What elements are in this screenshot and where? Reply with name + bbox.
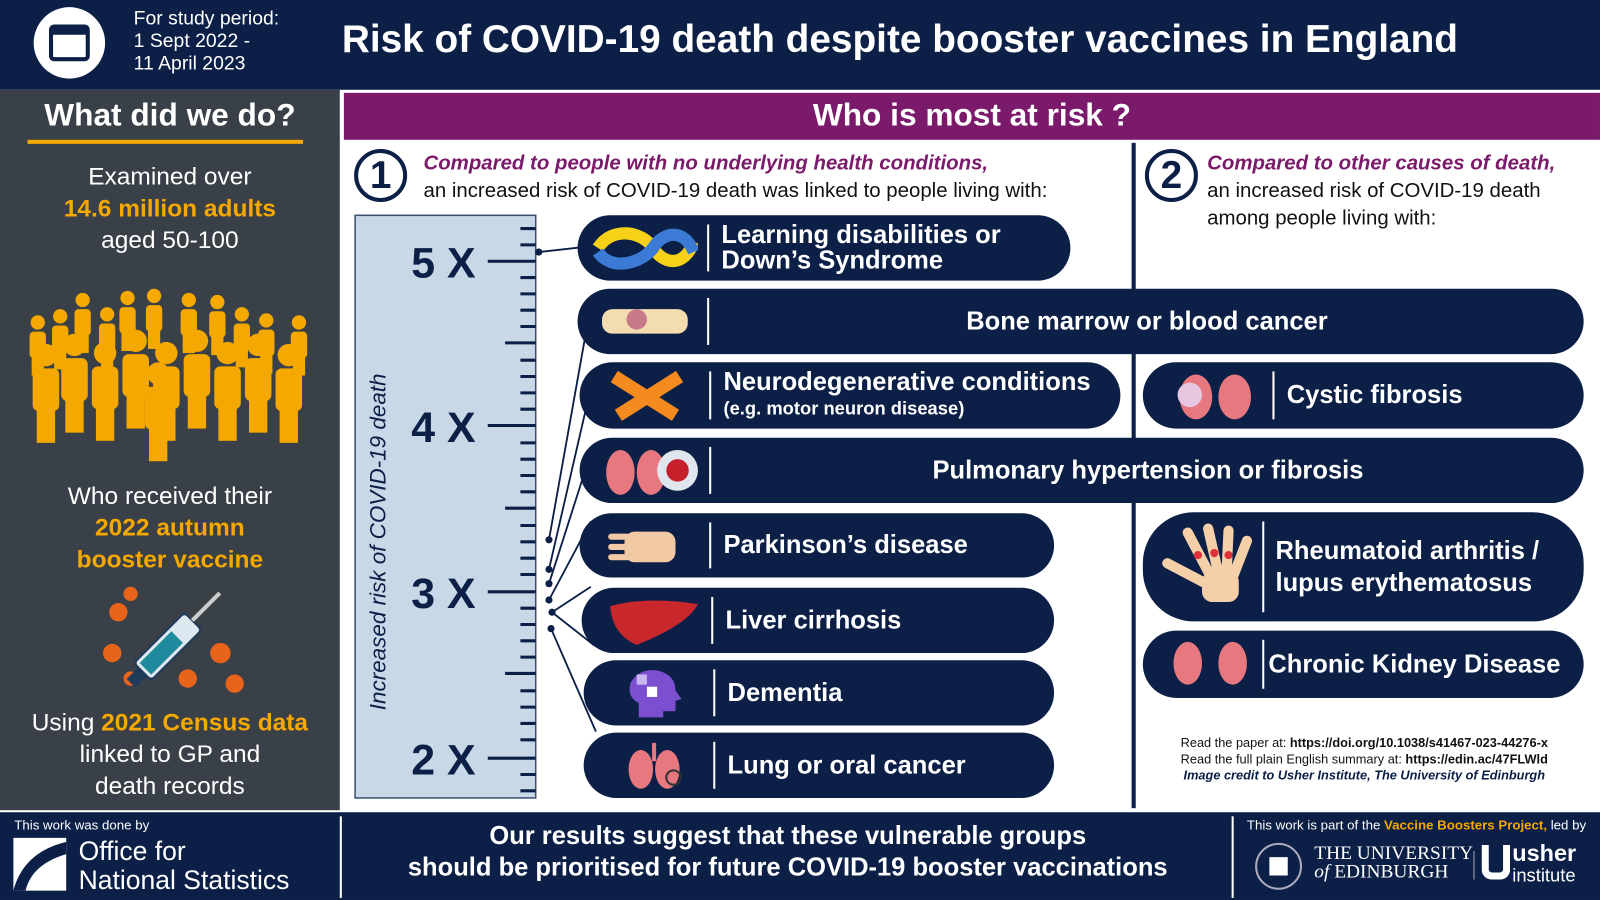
pill: right cystic fibrosis: [1143, 362, 1584, 429]
text: examined: [64, 163, 276, 254]
pill: liver: [582, 588, 1054, 653]
chart: risk ruler with connectors: [354, 214, 597, 799]
partner logos: This work is part of the Vaccine Boosters Project, led by: [1247, 817, 1586, 833]
ONS credit: Office for: [79, 836, 186, 866]
text: examined: 14.6 million adults: [64, 195, 276, 222]
pill: parkinson's: [580, 513, 1054, 578]
text: received booster: 2022 autumn: [95, 514, 245, 542]
pill: pulmonary: Pulmonary hypertension or fibrosis: [932, 456, 1363, 484]
pill: bone marrow: Bone marrow or blood cancer: [966, 307, 1328, 335]
pill: lung cancer: [584, 733, 1054, 798]
divider: [1132, 143, 1136, 808]
study period text: [134, 8, 279, 74]
partner logos: THE UNIVERSITY: [1314, 843, 1473, 864]
icon: ribbon: [592, 227, 698, 270]
section 1 header: [354, 149, 1047, 202]
icon: crowd: [30, 288, 308, 462]
references text: Read the full plain English summary at: https://edin.ac/47FLWld: [1181, 752, 1548, 766]
icon: liver: [610, 600, 698, 645]
section 1 header: 1: [370, 154, 391, 197]
chart: risk ruler with connectors: Increased risk of COVID-19 death: [366, 373, 391, 710]
icon: orange ribbon: [610, 370, 684, 421]
pill: dementia: Dementia: [728, 678, 842, 707]
study period text: 11 April 2023: [134, 53, 245, 74]
partner logos: institute: [1512, 865, 1576, 886]
conclusion text: [408, 821, 1168, 882]
icon: bone: [602, 309, 688, 334]
pill: learning disabilities: Learning disabilities or: [721, 220, 1001, 249]
partner logos: of EDINBURGH: [1314, 861, 1448, 883]
pill: rheumatoid: lupus erythematosus: [1276, 568, 1532, 596]
pill: right cystic fibrosis: Cystic fibrosis: [1287, 381, 1463, 409]
study period text: For study period:: [134, 8, 279, 30]
section 2 header: Compared to other causes of death,: [1207, 152, 1555, 174]
pill: dementia: [584, 660, 1054, 726]
pill: neurodegenerative: [580, 362, 1120, 429]
conclusion text: Our results suggest that these vulnerable groups: [489, 821, 1086, 850]
chart: risk ruler with connectors: 3 X: [411, 570, 476, 618]
icon: calendar: [34, 7, 105, 79]
icon: hand joints: [1162, 524, 1252, 602]
pill: lung cancer: Lung or oral cancer: [728, 751, 966, 779]
ONS credit: This work was done by: [14, 817, 149, 833]
text: census: [32, 709, 308, 800]
section 1 header: Compared to people with no underlying health conditions,: [423, 152, 988, 174]
text: examined: aged 50-100: [101, 227, 239, 254]
ONS credit: National Statistics: [79, 864, 289, 895]
panel: what did we do: [0, 90, 340, 810]
pill: neurodegenerative: Neurodegenerative conditions: [723, 367, 1091, 396]
chart: risk ruler with connectors: 5 X: [411, 240, 476, 288]
text: census: death records: [95, 772, 245, 800]
text: census: linked to GP and: [80, 741, 260, 768]
banner: who is most at risk: [344, 93, 1600, 140]
pill: learning disabilities: [578, 215, 1070, 281]
section 2 header: an increased risk of COVID-19 death: [1207, 180, 1541, 202]
section 2 header: 2: [1161, 154, 1182, 197]
pill: parkinson's: Parkinson’s disease: [723, 531, 968, 559]
text: examined: Examined over: [88, 163, 252, 191]
pill: pulmonary: [580, 438, 1584, 503]
footer: [0, 812, 1600, 900]
heading: What did we do?: [44, 97, 296, 133]
pill: learning disabilities: Down’s Syndrome: [721, 246, 943, 274]
pill: neurodegenerative: (e.g. motor neuron disease): [723, 398, 964, 418]
study period text: 1 Sept 2022 -: [134, 31, 250, 52]
title: Risk of COVID-19 death despite booster vaccines in England: [342, 18, 1458, 61]
section 2 header: [1144, 149, 1555, 230]
chart: risk ruler with connectors: 2 X: [411, 736, 476, 784]
pill: liver: Liver cirrhosis: [726, 606, 901, 634]
icon: kidneys: [1173, 642, 1247, 685]
text: received booster: booster vaccine: [77, 546, 263, 573]
ONS credit: [13, 817, 289, 895]
icon: head: [630, 670, 682, 718]
icon: lungs with heart: [606, 450, 698, 495]
pill: rheumatoid: [1143, 512, 1584, 621]
references text: [1181, 736, 1548, 783]
pill: bone marrow: [578, 289, 1584, 354]
icon: syringe with leaves: [103, 586, 244, 693]
pill: chronic kidney disease: [1143, 631, 1584, 698]
icon: hand: [608, 532, 676, 562]
header bar: [0, 0, 1600, 90]
pill: rheumatoid: Rheumatoid arthritis /: [1276, 536, 1539, 565]
conclusion text: should be prioritised for future COVID-19 booster vaccinations: [408, 853, 1168, 882]
section 2 header: among people living with:: [1207, 207, 1436, 230]
partner logos: [1247, 817, 1586, 890]
icon: lungs: [1178, 374, 1251, 420]
section 1 header: an increased risk of COVID-19 death was linked to people living with:: [423, 180, 1047, 202]
text: received booster: Who received their: [68, 483, 272, 510]
references text: Read the paper at: https://doi.org/10.1038/s41467-023-44276-x: [1181, 736, 1548, 750]
banner: who is most at risk: Who is most at risk ?: [813, 97, 1131, 133]
text: received booster: [68, 483, 272, 573]
partner logos: usher: [1512, 840, 1576, 866]
icon: lungs: [628, 742, 682, 789]
pill: chronic kidney disease: Chronic Kidney Disease: [1268, 649, 1560, 678]
references text: Image credit to Usher Institute, The University of Edinburgh: [1184, 768, 1545, 783]
text: census: Using 2021 Census data: [32, 709, 308, 737]
chart: risk ruler with connectors: 4 X: [411, 404, 476, 452]
